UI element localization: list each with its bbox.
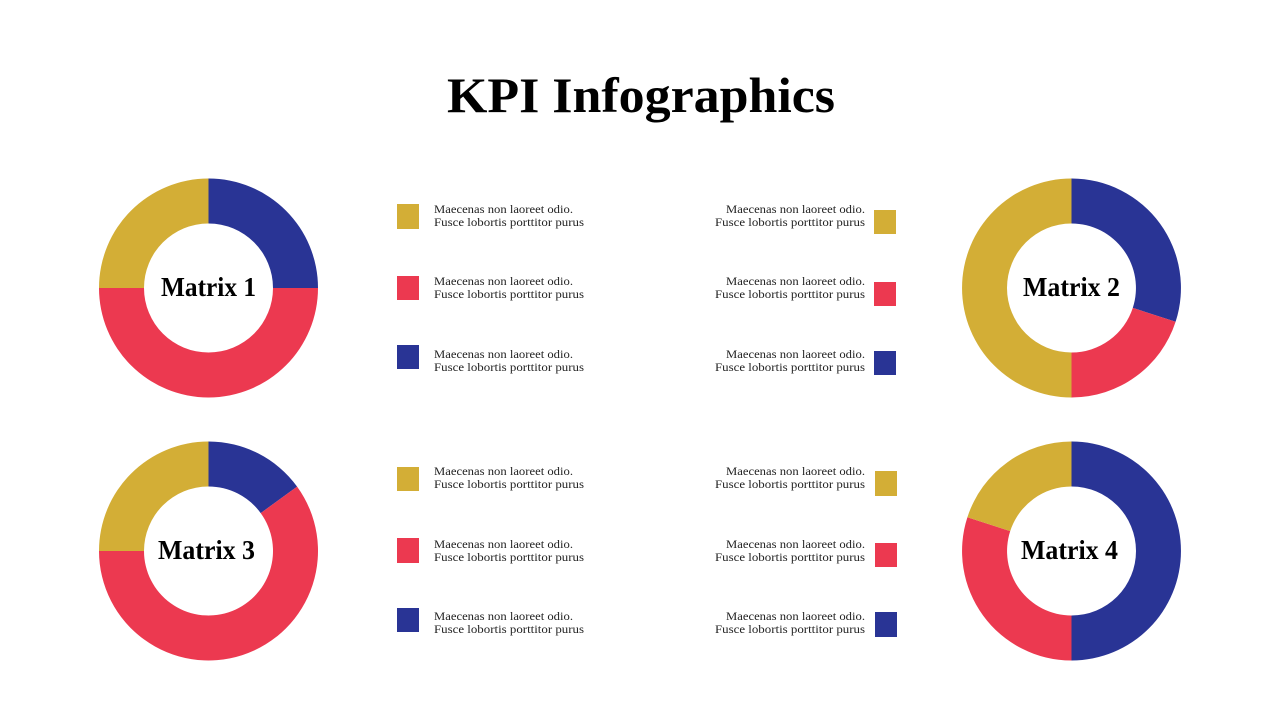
legend: Matrix 1 (397, 202, 584, 374)
legend item: blue: Maecenas non laoreet odio. (726, 347, 865, 361)
legend item: red (397, 537, 584, 564)
legend item: gold (715, 202, 896, 234)
legend item: blue: Fusce lobortis porttitor purus (434, 360, 584, 374)
legend item: gold (397, 202, 584, 229)
legend item: blue: Maecenas non laoreet odio. (434, 609, 573, 623)
legend item: blue (715, 609, 897, 637)
legend: Matrix 4 (715, 464, 897, 637)
legend: Matrix 2 (715, 202, 896, 375)
donut chart: Matrix 2: Matrix 2 (1023, 272, 1120, 302)
legend item: red: Maecenas non laoreet odio. (434, 537, 573, 551)
donut chart: Matrix 3: Matrix 3 (158, 535, 255, 565)
legend item: gold: Fusce lobortis porttitor purus (715, 215, 865, 229)
legend item: red: Fusce lobortis porttitor purus (715, 550, 865, 564)
legend item: red (397, 274, 584, 301)
legend item: gold: Maecenas non laoreet odio. (726, 464, 865, 478)
legend item: gold: Maecenas non laoreet odio. (434, 202, 573, 216)
legend item: gold (715, 464, 897, 496)
legend item: gold (397, 464, 584, 491)
donut chart: Matrix 1 (99, 178, 318, 397)
legend item: blue (397, 345, 584, 374)
donut chart: Matrix 2 (962, 178, 1181, 398)
legend item: gold: Maecenas non laoreet odio. (726, 202, 865, 216)
legend item: blue: Fusce lobortis porttitor purus (434, 622, 584, 636)
legend item: red (715, 537, 897, 567)
legend item: red: Maecenas non laoreet odio. (434, 274, 573, 288)
legend item: red: Fusce lobortis porttitor purus (434, 550, 584, 564)
legend item: blue: Maecenas non laoreet odio. (726, 609, 865, 623)
legend: Matrix 3 (397, 464, 584, 636)
legend item: blue: Fusce lobortis porttitor purus (715, 360, 865, 374)
legend item: gold: Maecenas non laoreet odio. (434, 464, 573, 478)
legend item: blue: Fusce lobortis porttitor purus (715, 622, 865, 636)
legend item: red: Maecenas non laoreet odio. (726, 274, 865, 288)
donut chart: Matrix 4 (962, 442, 1181, 660)
legend item: red: Fusce lobortis porttitor purus (715, 287, 865, 301)
legend item: blue (397, 608, 584, 636)
donut chart: Matrix 3 (99, 442, 318, 660)
legend item: red: Maecenas non laoreet odio. (726, 537, 865, 551)
legend item: gold: Fusce lobortis porttitor purus (715, 477, 865, 491)
legend item: gold: Fusce lobortis porttitor purus (434, 477, 584, 491)
legend item: gold: Fusce lobortis porttitor purus (434, 215, 584, 229)
legend item: red: Fusce lobortis porttitor purus (434, 287, 584, 301)
legend item: blue (715, 347, 896, 375)
title: KPI Infographics (447, 67, 835, 123)
legend item: red (715, 274, 896, 306)
legend item: blue: Maecenas non laoreet odio. (434, 347, 573, 361)
donut chart: Matrix 4: Matrix 4 (1021, 535, 1118, 565)
donut chart: Matrix 1: Matrix 1 (161, 272, 256, 302)
